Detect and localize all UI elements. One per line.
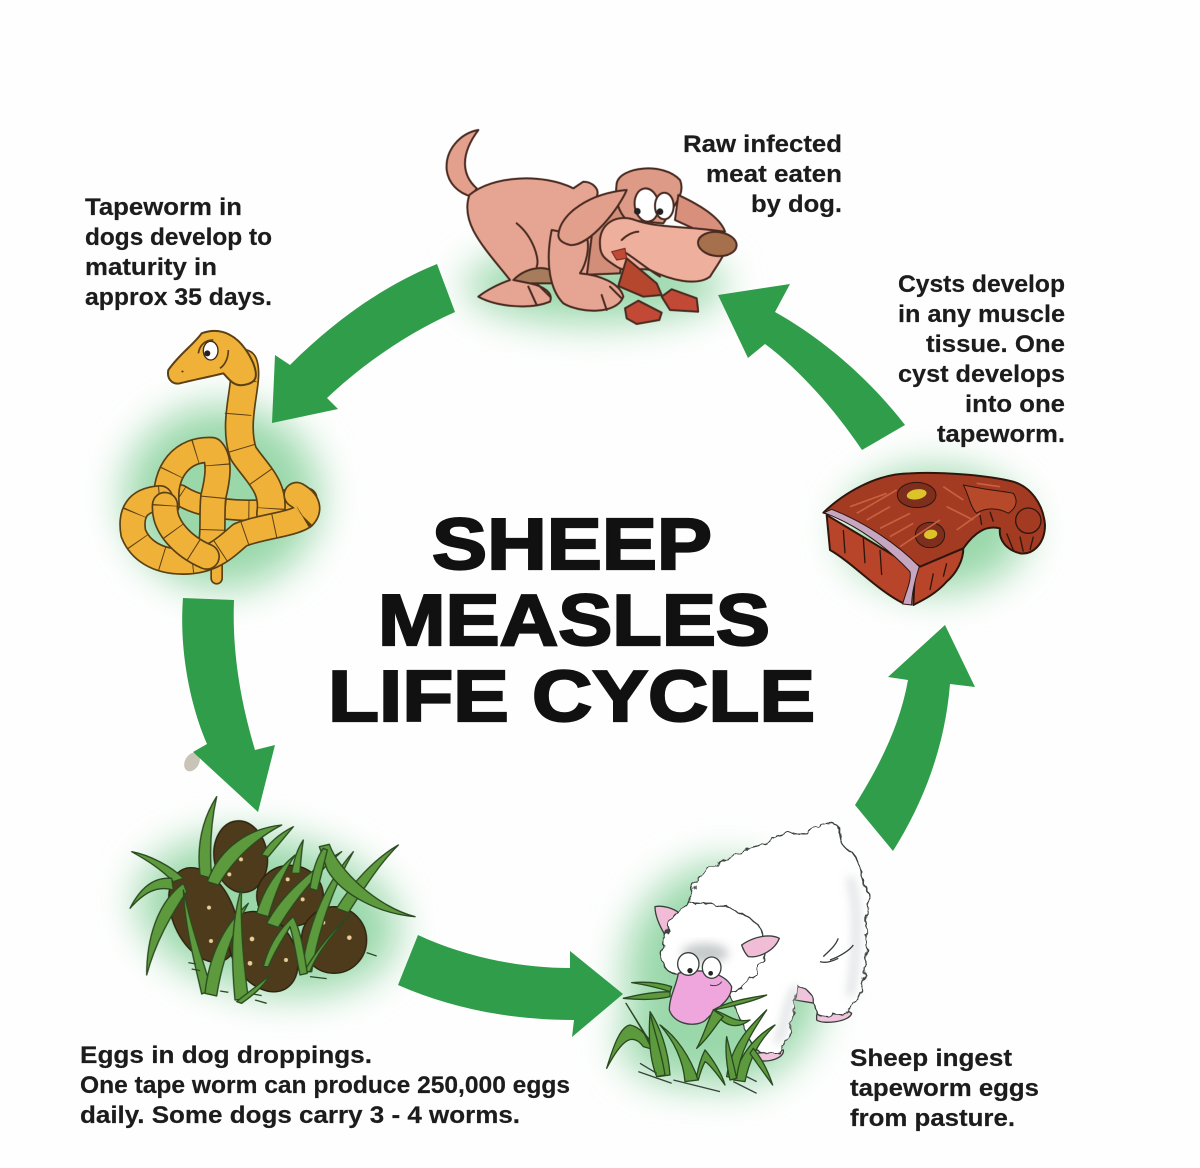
text: sheep ingest: from pasture.: [850, 1105, 1015, 1132]
text: cysts develop: cyst develops: [898, 361, 1065, 388]
meat grain: [850, 483, 1000, 547]
text: tapeworm in dogs: Tapeworm in: [85, 194, 242, 221]
tail: [198, 560, 236, 578]
text: sheep ingest: tapeworm eggs: [850, 1075, 1039, 1102]
dashes on the ground: [188, 953, 377, 1003]
text: cysts develop: [898, 271, 1065, 448]
text: raw infected meat: [683, 131, 842, 218]
text: tapeworm in dogs: maturity in: [85, 254, 217, 281]
icon: tapeworm: [133, 331, 307, 578]
egg spots: [207, 857, 352, 966]
text: cysts develop: into one: [965, 391, 1065, 418]
icon: infected meat: [823, 473, 1045, 605]
text: eggs in dog droppings: daily. Some dogs carry 3 - 4 worms.: [80, 1102, 520, 1129]
worm lower coil: [133, 495, 307, 562]
text: sheep ingest: [850, 1045, 1039, 1132]
title: SHEEP: [432, 505, 712, 585]
text: raw infected meat: by dog.: [751, 191, 842, 218]
text: cysts develop: in any muscle: [898, 301, 1065, 328]
smudge: [181, 750, 203, 774]
text: eggs in dog droppings: [80, 1042, 570, 1129]
grass in mouth and ground grass: [607, 982, 775, 1085]
worm head: [168, 331, 256, 385]
sheep body: [690, 823, 868, 1053]
arrow: droppings to sheep: [398, 935, 623, 1037]
icon: dog eating meat: [447, 130, 738, 324]
worm segments back: [180, 495, 307, 510]
worm loop: [166, 450, 218, 540]
text: sheep ingest: Sheep ingest: [850, 1045, 1012, 1072]
arrow: tapeworm to droppings: [182, 598, 275, 812]
text: cysts develop: Cysts develop: [898, 271, 1065, 298]
title: LIFE CYCLE: [328, 657, 815, 737]
text: eggs in dog droppings: Eggs in dog droppings.: [80, 1042, 372, 1069]
green background glows: [124, 247, 1027, 1087]
text: eggs in dog droppings: One tape worm can produce 250,000 eggs: [80, 1072, 570, 1099]
icon: sheep grazing: [607, 823, 868, 1093]
text: tapeworm in dogs: dogs develop to: [85, 224, 272, 251]
text: raw infected meat: meat eaten: [706, 161, 842, 188]
text: tapeworm in dogs: approx 35 days.: [85, 284, 272, 311]
sheep ear right: [742, 936, 779, 957]
arrow: sheep to meat: [855, 625, 975, 851]
wool shading: [777, 877, 856, 1043]
grass blades: [199, 797, 217, 878]
text: tapeworm in dogs: [85, 194, 272, 311]
text: raw infected meat: Raw infected: [683, 131, 842, 158]
sheep ear left: [655, 906, 680, 935]
text: cysts develop: tissue. One: [926, 331, 1065, 358]
sheep head fleece: [661, 903, 765, 992]
title: MEASLES: [378, 581, 770, 661]
title: [328, 505, 815, 737]
text: cysts develop: tapeworm.: [937, 421, 1065, 448]
arrow: dog to tapeworm: [272, 264, 455, 423]
icon: dog droppings in grass: [130, 797, 415, 1005]
fleece shading: [682, 943, 728, 963]
sheep face: [669, 971, 732, 1024]
arrow: meat to dog: [718, 284, 905, 450]
